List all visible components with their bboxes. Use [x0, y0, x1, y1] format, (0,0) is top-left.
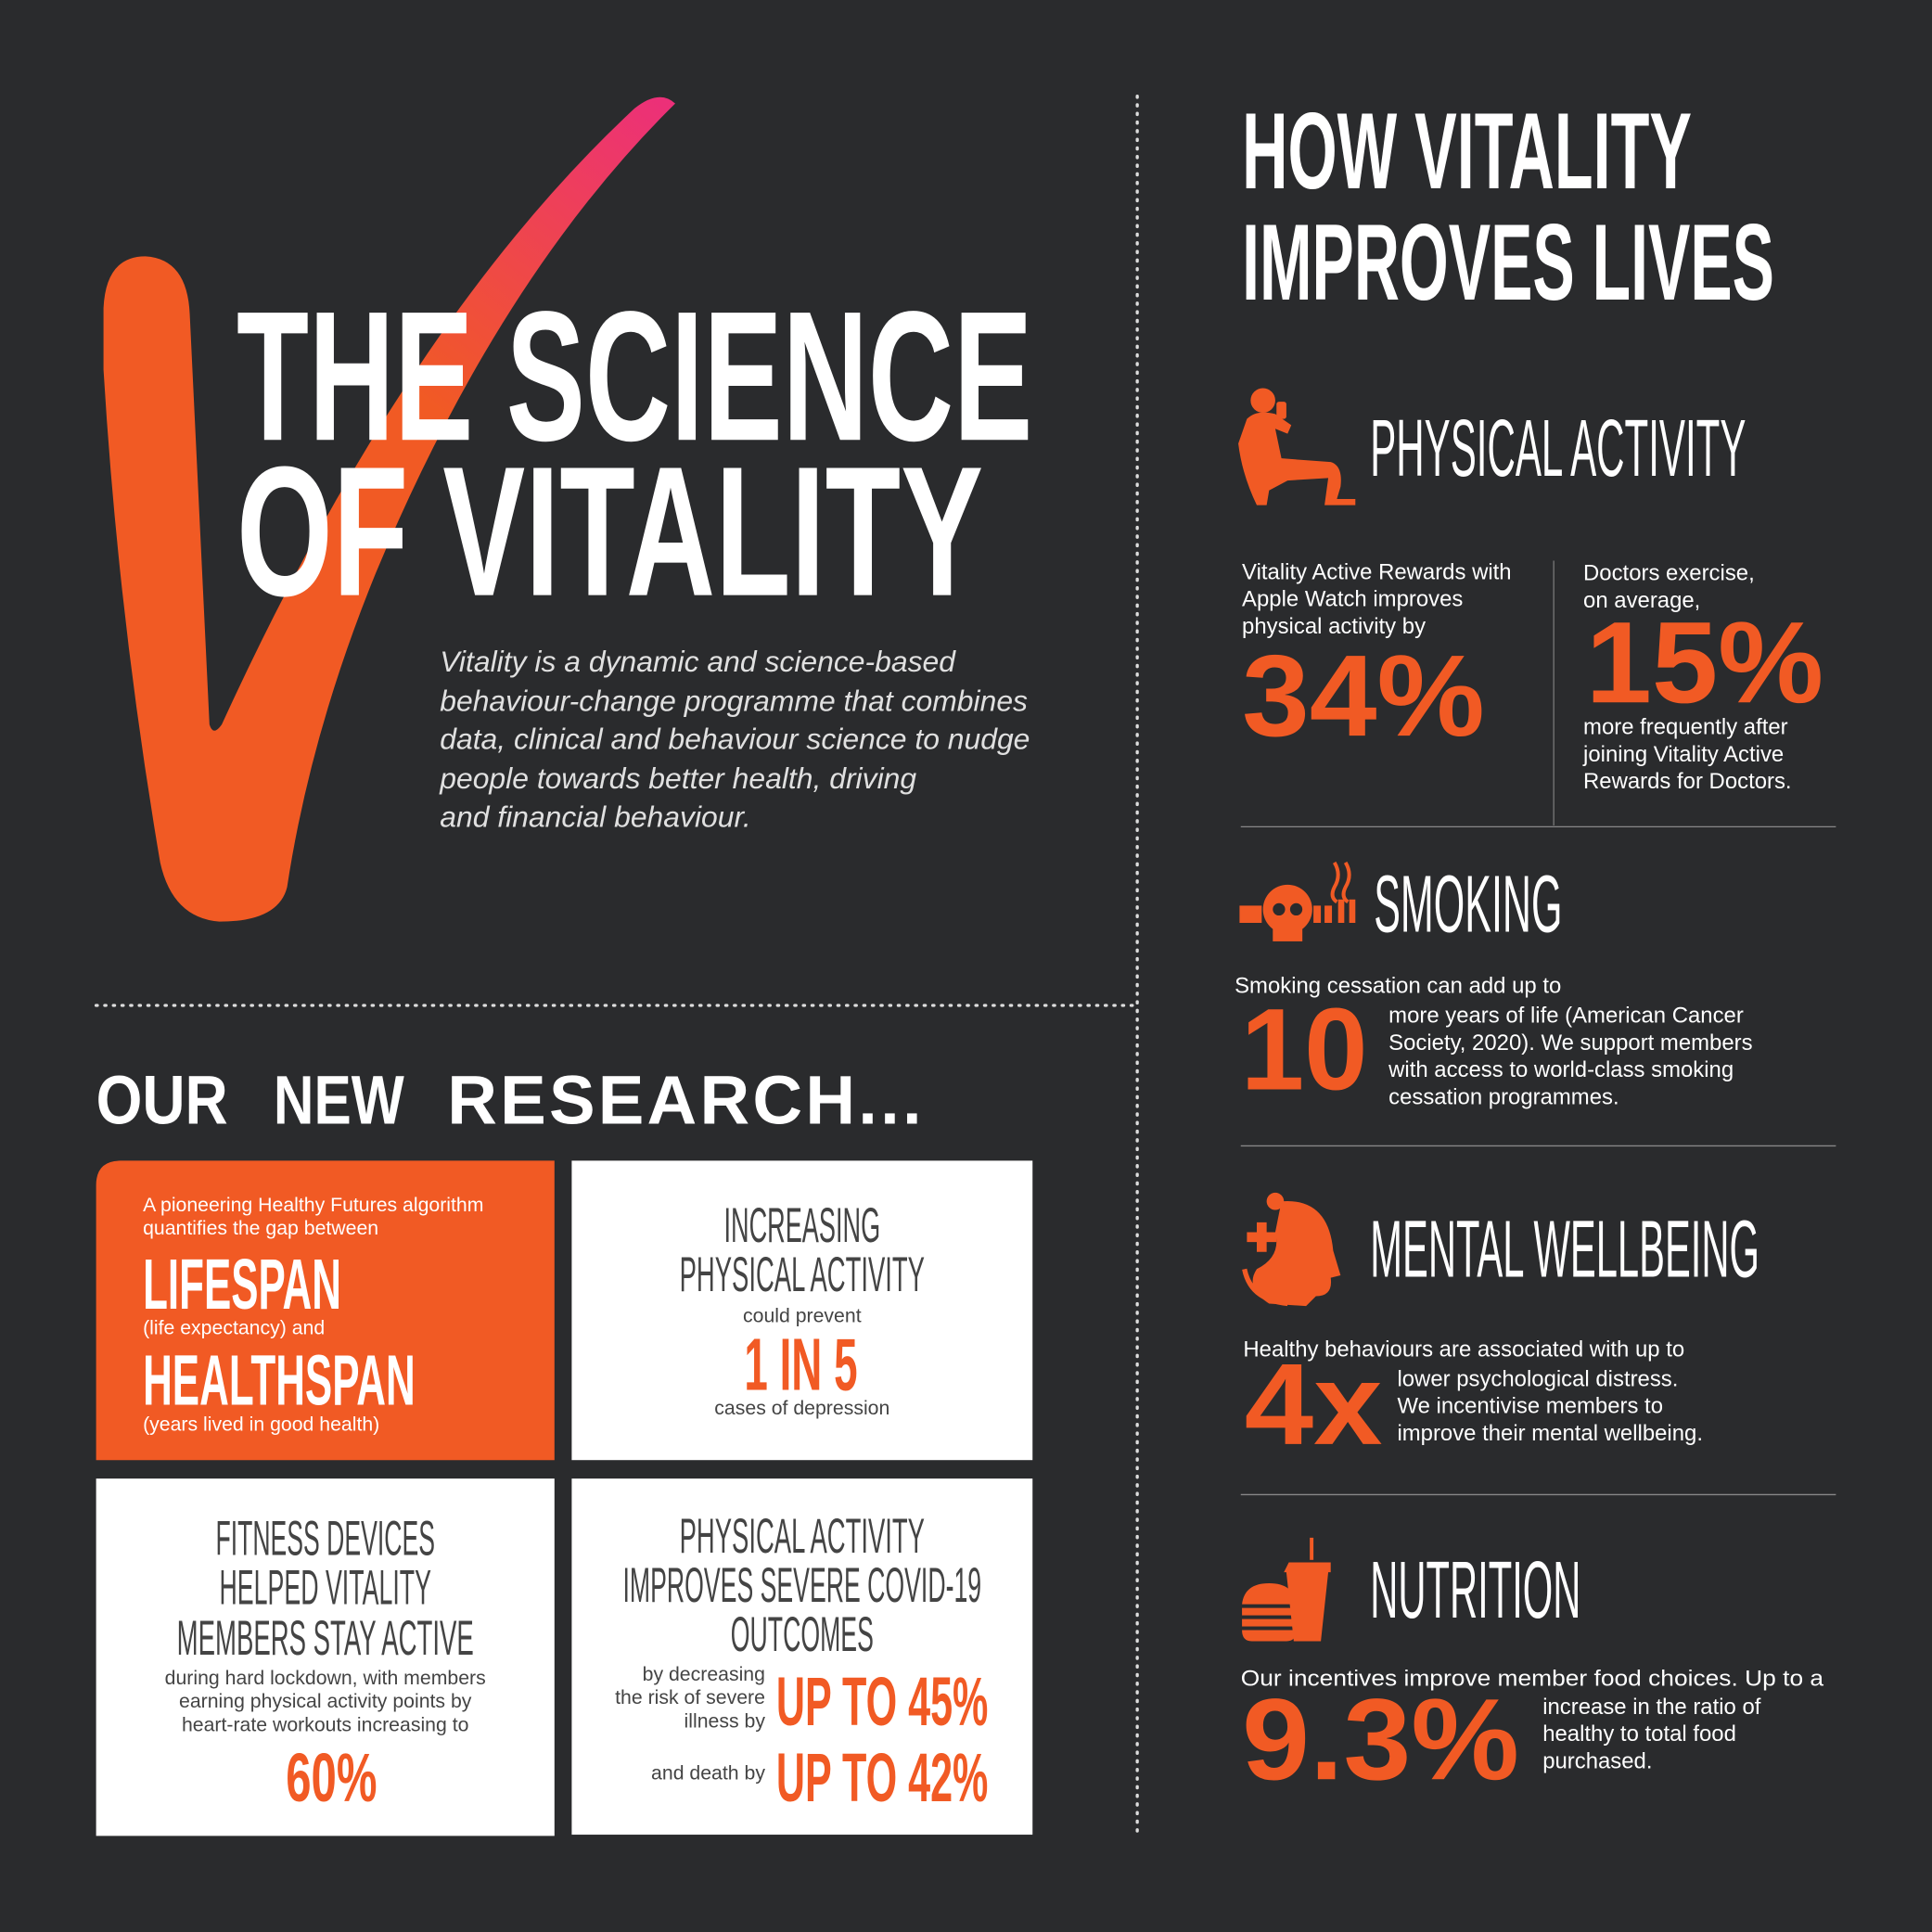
- stat: 15%: 15%: [1586, 598, 1823, 727]
- stat: 10 years: 10: [1241, 985, 1368, 1114]
- panel: lifespan healthspan: (years lived in good health): [143, 1413, 379, 1435]
- stat: 34%: Vitality Active Rewards with: [1242, 559, 1512, 584]
- panel: fitness devices: during hard lockdown, with members: [165, 1667, 486, 1689]
- panel: covid outcomes: the risk of severe: [615, 1686, 765, 1708]
- icon: person sitting drinking: [1238, 388, 1355, 505]
- panel: covid outcomes: [571, 1478, 1032, 1835]
- intro paragraph: Vitality is a dynamic and science-based: [440, 645, 956, 678]
- stat: 34%: physical activity by: [1242, 614, 1426, 639]
- intro paragraph: and financial behaviour.: [440, 800, 751, 833]
- stat: 4x: improve their mental wellbeing.: [1397, 1421, 1703, 1446]
- heading: our new research: OUR: [96, 1062, 228, 1139]
- panel: lifespan healthspan: [96, 1160, 555, 1460]
- stat: 34%: [1242, 559, 1512, 761]
- panel: lifespan healthspan: (life expectancy) and: [143, 1317, 325, 1339]
- stat: 9.3%: healthy to total food: [1542, 1721, 1736, 1746]
- stat: 15%: joining Vitality Active: [1582, 742, 1784, 767]
- panel: fitness devices: heart-rate workouts increasing to: [182, 1713, 468, 1735]
- stat: 15%: Rewards for Doctors.: [1583, 769, 1792, 794]
- panel: covid outcomes: and death by: [651, 1761, 765, 1784]
- stat: 15%: more frequently after: [1583, 715, 1788, 740]
- panel: depression: 1 IN 5: [744, 1323, 858, 1405]
- title: [237, 274, 1032, 635]
- stat: 4x: We incentivise members to: [1397, 1394, 1663, 1419]
- stat: 9.3%: [1241, 1666, 1824, 1804]
- stat: 15%: [1582, 561, 1823, 794]
- stat: 4x: 4x: [1245, 1340, 1383, 1469]
- panel: depression: PHYSICAL ACTIVITY: [680, 1247, 925, 1302]
- stat: 10 years: more years of life (American Cancer: [1388, 1004, 1744, 1029]
- intro paragraph: behaviour-change programme that combines: [440, 685, 1028, 718]
- infographic canvas: NUTRITION: [1370, 1544, 1580, 1635]
- heading: how vitality improves lives: [1242, 90, 1774, 323]
- stat: 10 years: [1235, 974, 1753, 1114]
- heading: our new research: [96, 1062, 922, 1139]
- stat: 10 years: with access to world-class smoking: [1388, 1057, 1734, 1082]
- stat: 15%: on average,: [1583, 588, 1700, 613]
- stat: 9.3%: purchased.: [1542, 1748, 1653, 1773]
- panel: fitness devices: MEMBERS STAY ACTIVE: [177, 1611, 474, 1666]
- intro paragraph: people towards better health, driving: [439, 761, 916, 795]
- panel: covid outcomes: IMPROVES SEVERE COVID-19: [623, 1558, 981, 1613]
- panel: covid outcomes: OUTCOMES: [731, 1607, 874, 1662]
- panel: depression: could prevent: [743, 1304, 862, 1326]
- panel: lifespan healthspan: A pioneering Healthy Futures algorithm: [143, 1194, 483, 1216]
- stat: 10 years: cessation programmes.: [1388, 1084, 1619, 1109]
- stat: 4x: [1243, 1337, 1703, 1469]
- infographic canvas: SMOKING: [1374, 858, 1562, 949]
- stat: 34%: 34%: [1242, 632, 1485, 761]
- panel: fitness devices: HELPED VITALITY: [219, 1561, 431, 1616]
- stat: 9.3%: Our incentives improve member food choices. Up to a: [1241, 1666, 1824, 1691]
- stat: 10 years: Smoking cessation can add up to: [1235, 974, 1561, 999]
- title: THE SCIENCE: [237, 274, 1032, 480]
- heading: our new research: RESEARCH...: [447, 1062, 922, 1139]
- panel: covid outcomes: PHYSICAL ACTIVITY: [680, 1509, 925, 1564]
- panel: covid outcomes: UP TO 42%: [776, 1739, 988, 1816]
- panel: fitness devices: earning physical activity points by: [179, 1690, 472, 1712]
- intro paragraph: [439, 645, 1030, 833]
- panel: depression: [571, 1160, 1032, 1460]
- icon: burger and drink: [1242, 1538, 1331, 1641]
- stat: 4x: Healthy behaviours are associated with up to: [1243, 1337, 1684, 1363]
- intro paragraph: data, clinical and behaviour science to nudge: [440, 723, 1030, 756]
- panel: fitness devices: FITNESS DEVICES: [215, 1511, 435, 1566]
- panel: lifespan healthspan: LIFESPAN: [143, 1245, 341, 1324]
- icon: mental wellbeing head: [1245, 1193, 1340, 1306]
- panel: depression: INCREASING: [723, 1198, 880, 1253]
- panel: fitness devices: [96, 1478, 555, 1836]
- stat: 15%: Doctors exercise,: [1583, 561, 1755, 586]
- heading: our new research: NEW: [274, 1062, 404, 1139]
- panel: covid outcomes: UP TO 45%: [776, 1663, 988, 1740]
- stat: 4x: lower psychological distress.: [1397, 1366, 1678, 1391]
- checkmark graphic: [104, 97, 675, 922]
- stat: 10 years: Society, 2020). We support members: [1388, 1030, 1753, 1056]
- panel: fitness devices: 60%: [286, 1739, 377, 1816]
- panel: covid outcomes: illness by: [685, 1709, 765, 1732]
- title: OF VITALITY: [237, 429, 983, 635]
- stat: 9.3%: increase in the ratio of: [1542, 1695, 1761, 1720]
- panel: lifespan healthspan: HEALTHSPAN: [143, 1340, 416, 1420]
- stat: 9.3%: 9.3%: [1242, 1675, 1519, 1804]
- panel: covid outcomes: by decreasing: [643, 1663, 765, 1685]
- stat: 34%: Apple Watch improves: [1242, 587, 1463, 612]
- icon: smoking skull: [1239, 863, 1355, 941]
- panel: depression: cases of depression: [714, 1397, 889, 1419]
- panel: lifespan healthspan: quantifies the gap between: [143, 1217, 378, 1239]
